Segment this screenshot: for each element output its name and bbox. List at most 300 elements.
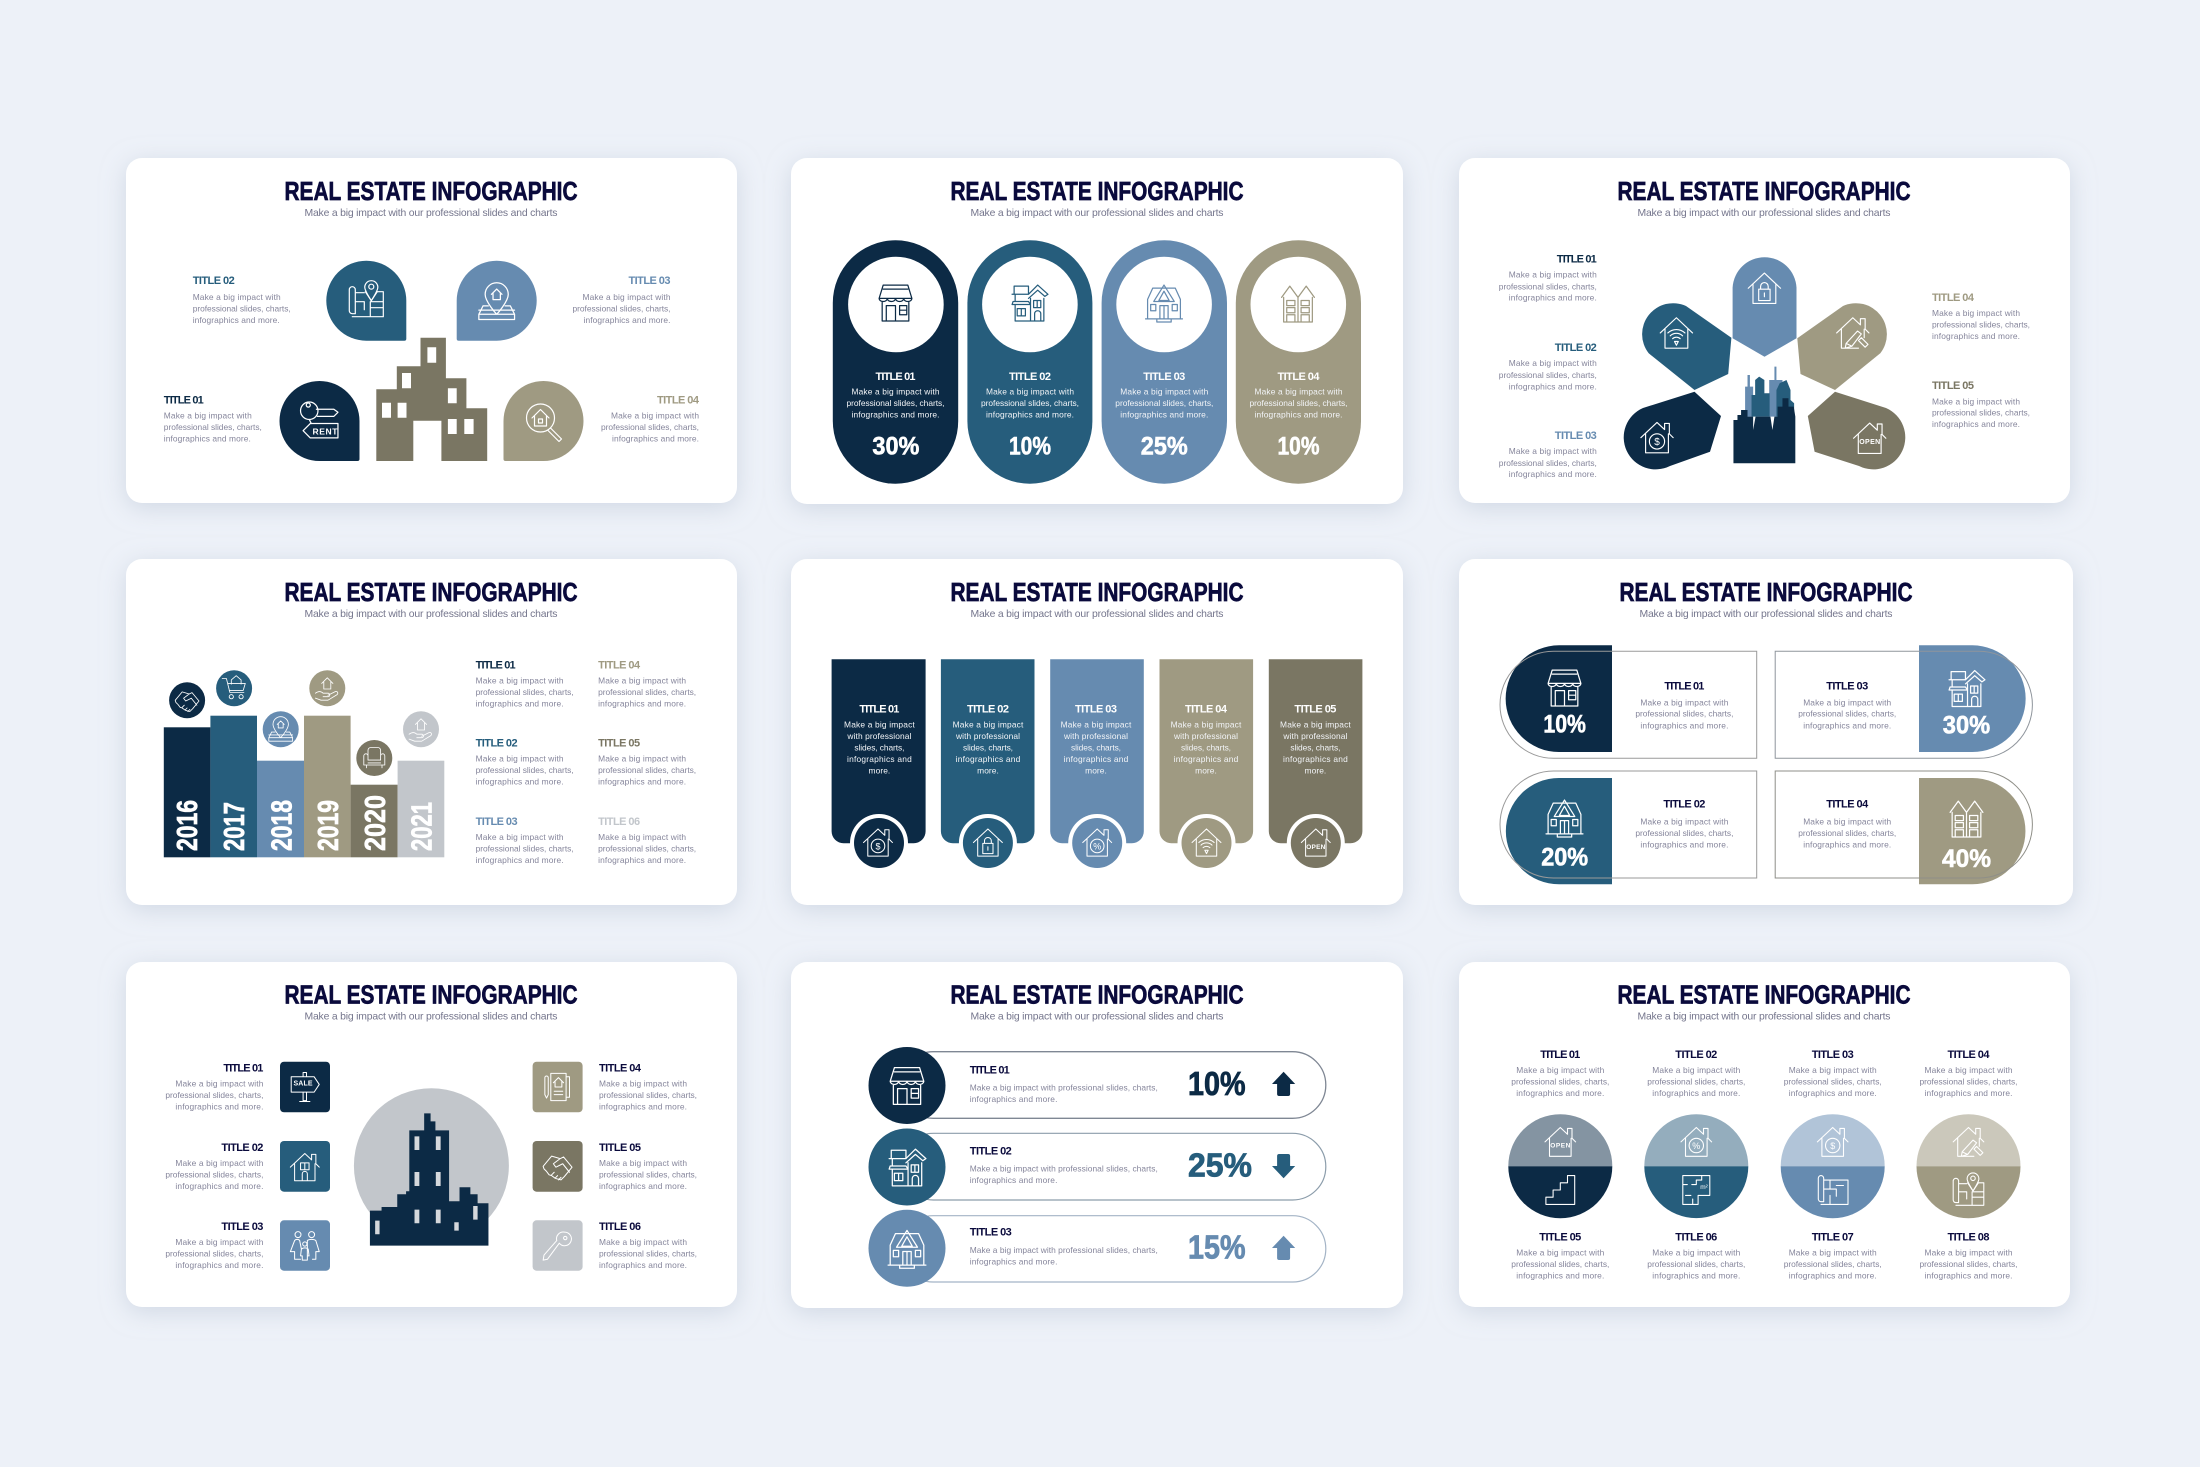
column 2: infographics and xyxy=(956,754,1021,764)
text: title 05 xyxy=(1932,380,2030,429)
text: title 01: TITLE 01 xyxy=(223,1063,263,1075)
row: title 02: Make a big impact with professional slides, charts, xyxy=(970,1164,1158,1174)
icon: hand with home xyxy=(403,711,439,747)
capsule 3: TITLE 03 xyxy=(1143,371,1185,383)
text: title 04: TITLE 04 xyxy=(657,395,700,407)
column 5: infographics and xyxy=(1283,754,1348,764)
column 2: TITLE 02 xyxy=(967,703,1009,715)
row: title 02: TITLE 02 xyxy=(970,1146,1012,1158)
text: title 05: TITLE 05 xyxy=(1539,1232,1581,1244)
text: title 02: professional slides, charts, xyxy=(476,765,574,775)
text: title 01: infographics and more. xyxy=(1509,293,1597,303)
capsule 4: TITLE 04 xyxy=(1278,371,1320,383)
building silhouette xyxy=(370,1113,488,1246)
petal: teal wifi xyxy=(1642,303,1731,390)
text: title 04: professional slides, charts, xyxy=(1932,320,2030,330)
capsule 2 xyxy=(967,240,1092,484)
card: title 03: TITLE 03 xyxy=(1826,680,1868,692)
text: title 04: infographics and more. xyxy=(598,699,686,709)
row: title 03: infographics and more. xyxy=(970,1256,1057,1266)
column 5: slides, charts, xyxy=(1290,742,1340,752)
text: title 07: TITLE 07 xyxy=(1812,1232,1854,1244)
icon tile: handshake xyxy=(533,1141,583,1192)
text: title 08: TITLE 08 xyxy=(1948,1232,1990,1244)
subtitle: Make a big impact with our professional slides and charts xyxy=(970,609,1224,620)
text: title 04: infographics and more. xyxy=(1924,1088,2012,1098)
row: title 01 xyxy=(868,1047,1326,1124)
bar chart: 2020 xyxy=(360,795,392,851)
heading: REAL ESTATE INFOGRAPHIC xyxy=(950,577,1244,607)
panel: five columns with icons xyxy=(791,559,1403,905)
text: title 05 xyxy=(1511,1232,1609,1281)
column 3: % xyxy=(1093,842,1101,852)
column 1: slides, charts, xyxy=(854,742,904,752)
bar chart: 2017 xyxy=(219,802,251,851)
column 4: more. xyxy=(1195,766,1217,776)
heading: REAL ESTATE INFOGRAPHIC xyxy=(284,980,578,1010)
bar chart xyxy=(164,716,444,857)
grey circle backdrop xyxy=(354,1088,509,1243)
text: title 03: Make a big impact with xyxy=(1509,446,1597,456)
heading: REAL ESTATE INFOGRAPHIC xyxy=(1620,577,1913,607)
row: title 03: 15% xyxy=(1188,1229,1246,1266)
card: title 04: infographics and more. xyxy=(1803,840,1891,850)
column 4: TITLE 04 xyxy=(1185,703,1228,715)
text: title 01: infographics and more. xyxy=(476,699,564,709)
text: title 02: TITLE 02 xyxy=(476,738,518,750)
subtitle: Make a big impact with our professional slides and charts xyxy=(1638,1012,1890,1022)
icon: handshake xyxy=(169,682,205,718)
column 4 xyxy=(1160,659,1253,872)
column 3: Make a big impact xyxy=(1061,719,1132,729)
capsule 3 xyxy=(1102,240,1227,484)
capsule 2: 10% xyxy=(1009,433,1051,461)
text: title 02: Make a big impact with xyxy=(193,292,281,302)
text: title 05: Make a big impact with xyxy=(1516,1248,1605,1258)
text: title 02 xyxy=(165,1142,264,1191)
capsule 4 xyxy=(1236,240,1361,484)
capsule 4: infographics and more. xyxy=(1254,409,1342,419)
card: title 02: infographics and more. xyxy=(1640,840,1728,850)
text: title 05: TITLE 05 xyxy=(1932,380,1974,392)
heading: REAL ESTATE INFOGRAPHIC xyxy=(950,980,1244,1010)
text: title 04: professional slides, charts, xyxy=(601,422,699,432)
column 2 xyxy=(941,659,1034,872)
text: title 03: infographics and more. xyxy=(1509,469,1597,479)
text: title 05: professional slides, charts, xyxy=(598,765,696,775)
row: title 01: TITLE 01 xyxy=(970,1064,1010,1076)
text: title 03: Make a big impact with xyxy=(175,1237,264,1247)
heading: REAL ESTATE INFOGRAPHIC xyxy=(284,176,578,206)
card: title 01: TITLE 01 xyxy=(1664,680,1704,692)
bar chart: 2021 xyxy=(406,802,438,851)
split circle 2: % xyxy=(1692,1141,1700,1151)
split circle 4 xyxy=(1916,1114,2020,1218)
capsule 1: TITLE 01 xyxy=(876,371,916,383)
text: title 03 xyxy=(165,1221,264,1270)
text: title 02 xyxy=(1499,342,1597,391)
column 2: Make a big impact xyxy=(953,719,1024,729)
capsule 4: Make a big impact with xyxy=(1254,386,1343,396)
column 4: with professional xyxy=(1173,731,1238,741)
text: title 04: TITLE 04 xyxy=(598,660,641,672)
text: title 05: Make a big impact with xyxy=(1932,396,2020,406)
text: title 02 xyxy=(476,738,574,787)
text: title 03: professional slides, charts, xyxy=(1784,1076,1882,1086)
text: title 02: TITLE 02 xyxy=(193,275,235,287)
panel: central building with six items xyxy=(126,962,737,1307)
text: title 02: Make a big impact with xyxy=(175,1158,264,1168)
text: title 05: infographics and more. xyxy=(599,1181,687,1191)
capsule 1: 30% xyxy=(872,433,919,461)
card: title 04 xyxy=(1775,771,2032,884)
text: title 02: Make a big impact with xyxy=(476,754,564,764)
text: title 04 xyxy=(1932,292,2030,341)
card: title 03: 30% xyxy=(1943,712,1990,740)
text: title 03: infographics and more. xyxy=(175,1260,263,1270)
text: title 04: professional slides, charts, xyxy=(598,687,696,697)
text: title 07: infographics and more. xyxy=(1789,1271,1877,1281)
text: title 05: infographics and more. xyxy=(1932,419,2020,429)
row: title 02: infographics and more. xyxy=(970,1175,1057,1185)
capsule 3: Make a big impact with xyxy=(1120,386,1209,396)
icon tile: family xyxy=(280,1220,330,1271)
text: title 02 xyxy=(1647,1049,1745,1098)
column 5: Make a big impact xyxy=(1280,719,1351,729)
icon: armchair xyxy=(356,740,392,776)
text: title 04: TITLE 04 xyxy=(599,1063,642,1075)
column 4: slides, charts, xyxy=(1181,742,1231,752)
text: title 01: infographics and more. xyxy=(175,1102,263,1112)
row: title 03: Make a big impact with professional slides, charts, xyxy=(970,1245,1158,1255)
text: title 01: professional slides, charts, xyxy=(1511,1076,1609,1086)
split circle 2 xyxy=(1644,1114,1748,1218)
petal: khaki pen xyxy=(1797,303,1887,390)
text: title 03 xyxy=(476,816,574,865)
text: title 03 xyxy=(1499,430,1597,479)
card: title 01 xyxy=(1500,645,1757,758)
card: title 04: Make a big impact with xyxy=(1803,817,1892,827)
text: title 07 xyxy=(1784,1232,1882,1281)
text: title 06 xyxy=(1647,1232,1745,1281)
capsule 3: professional slides, charts, xyxy=(1115,398,1213,408)
text: title 03: infographics and more. xyxy=(476,855,564,865)
subtitle: Make a big impact with our professional slides and charts xyxy=(304,208,558,219)
text: title 02: professional slides, charts, xyxy=(193,304,291,314)
column 2: slides, charts, xyxy=(963,742,1013,752)
column 3: TITLE 03 xyxy=(1075,703,1117,715)
text: title 04: professional slides, charts, xyxy=(599,1090,697,1100)
capsule 1: infographics and more. xyxy=(852,409,940,419)
capsule 2: Make a big impact with xyxy=(986,386,1074,396)
text: title 03: Make a big impact with xyxy=(582,292,671,302)
pin: title 04 search xyxy=(504,381,584,461)
text: title 01 xyxy=(164,395,262,444)
text: title 01: infographics and more. xyxy=(164,434,251,444)
text: title 04 xyxy=(598,660,696,709)
panel: four pill cards with percentages xyxy=(1459,559,2073,905)
heading: REAL ESTATE INFOGRAPHIC xyxy=(1618,176,1911,206)
card: title 01: Make a big impact with xyxy=(1640,697,1729,707)
panel: five petals with city xyxy=(1459,158,2070,503)
column 4: Make a big impact xyxy=(1171,719,1242,729)
split circle 3: $ xyxy=(1830,1141,1835,1151)
subtitle: Make a big impact with our professional slides and charts xyxy=(304,609,558,620)
heading: REAL ESTATE INFOGRAPHIC xyxy=(950,176,1244,206)
text: title 08: Make a big impact with xyxy=(1924,1248,2013,1258)
text: title 06: professional slides, charts, xyxy=(1647,1259,1745,1269)
text: title 07: professional slides, charts, xyxy=(1784,1259,1882,1269)
text: title 01: professional slides, charts, xyxy=(476,687,574,697)
text: title 01: TITLE 01 xyxy=(164,395,204,407)
card: title 04: 40% xyxy=(1942,845,1991,873)
text: title 02: professional slides, charts, xyxy=(1647,1076,1745,1086)
text: title 04: Make a big impact with xyxy=(599,1079,687,1089)
text: title 04: infographics and more. xyxy=(612,434,699,444)
text: title 01 xyxy=(165,1063,264,1112)
text: title 02: professional slides, charts, xyxy=(165,1170,263,1180)
column 5 xyxy=(1269,659,1362,872)
text: title 06: infographics and more. xyxy=(598,855,686,865)
text: title 03: TITLE 03 xyxy=(221,1221,263,1233)
text: title 08 xyxy=(1920,1232,2018,1281)
capsule 4: 10% xyxy=(1278,433,1320,461)
text: title 05 xyxy=(598,738,696,787)
capsule 3: 25% xyxy=(1141,433,1188,461)
icon: hand with house xyxy=(309,670,345,706)
capsule 2: infographics and more. xyxy=(986,409,1074,419)
text: title 01: professional slides, charts, xyxy=(1499,281,1597,291)
text: title 04: TITLE 04 xyxy=(1948,1049,1990,1061)
icon tile: sale sign xyxy=(280,1062,330,1112)
heading: REAL ESTATE INFOGRAPHIC xyxy=(284,577,578,607)
pin: title 02 map xyxy=(326,261,406,341)
icon tile: contract xyxy=(533,1062,583,1112)
text: title 03: professional slides, charts, xyxy=(476,844,574,854)
text: title 04: Make a big impact with xyxy=(611,411,699,421)
text: title 06 xyxy=(598,816,696,865)
text: title 02: professional slides, charts, xyxy=(1499,370,1597,380)
text: title 03: professional slides, charts, xyxy=(572,304,670,314)
text: title 05: professional slides, charts, xyxy=(1511,1259,1609,1269)
column 5: with professional xyxy=(1282,731,1348,741)
petal: olive open: OPEN xyxy=(1859,439,1880,446)
text: title 01 xyxy=(476,660,574,709)
text: title 04: professional slides, charts, xyxy=(1920,1076,2018,1086)
text: title 01: Make a big impact with xyxy=(175,1079,264,1089)
card: title 01: infographics and more. xyxy=(1640,720,1728,730)
column 4: infographics and xyxy=(1174,754,1239,764)
card: title 03: Make a big impact with xyxy=(1803,697,1892,707)
text: title 06: infographics and more. xyxy=(599,1260,687,1270)
text: title 02: infographics and more. xyxy=(1509,381,1597,391)
capsule 4: professional slides, charts, xyxy=(1250,398,1348,408)
petal: olive open xyxy=(1808,392,1905,469)
text: title 03: Make a big impact with xyxy=(476,832,564,842)
row: title 01: Make a big impact with professional slides, charts, xyxy=(970,1082,1158,1092)
subtitle: Make a big impact with our professional slides and charts xyxy=(1640,609,1892,620)
card: title 03: infographics and more. xyxy=(1803,720,1891,730)
column 5: TITLE 05 xyxy=(1294,703,1336,715)
text: title 01: Make a big impact with xyxy=(164,411,252,421)
text: title 04: Make a big impact with xyxy=(1932,308,2020,318)
column 3: slides, charts, xyxy=(1071,742,1121,752)
text: title 05 xyxy=(599,1142,697,1191)
column 3: infographics and xyxy=(1064,754,1129,764)
text: title 06: TITLE 06 xyxy=(1675,1232,1717,1244)
split circle 1: OPEN xyxy=(1550,1142,1571,1150)
icon: cart xyxy=(216,670,252,706)
card: title 02: Make a big impact with xyxy=(1640,817,1729,827)
bar chart: 2016 xyxy=(172,800,204,851)
card: title 03: professional slides, charts, xyxy=(1798,709,1896,719)
capsule 1 xyxy=(833,240,958,484)
column 1 xyxy=(832,659,926,872)
text: title 05: TITLE 05 xyxy=(599,1142,641,1154)
text: title 02: infographics and more. xyxy=(1652,1088,1740,1098)
card: title 02: professional slides, charts, xyxy=(1635,828,1733,838)
panel: yearly bar chart xyxy=(126,559,737,905)
card: title 02 xyxy=(1500,771,1757,884)
column 1: more. xyxy=(869,766,890,776)
column 5: more. xyxy=(1305,766,1326,776)
petal: navy dollar xyxy=(1624,392,1721,469)
text: title 08: infographics and more. xyxy=(1924,1271,2012,1281)
text: title 01 xyxy=(1499,254,1597,303)
text: title 03 xyxy=(1784,1049,1882,1098)
row: title 01: infographics and more. xyxy=(970,1094,1057,1104)
text: title 06: Make a big impact with xyxy=(599,1237,687,1247)
text: title 02: TITLE 02 xyxy=(1555,342,1597,354)
text: title 03: TITLE 03 xyxy=(1555,430,1597,442)
text: title 01: Make a big impact with xyxy=(476,676,564,686)
text: title 02: infographics and more. xyxy=(193,315,280,325)
text: title 02 xyxy=(193,275,291,325)
text: title 05: Make a big impact with xyxy=(598,754,686,764)
icon tile: house xyxy=(280,1141,330,1192)
text: title 05: infographics and more. xyxy=(598,777,686,787)
column 5: OPEN xyxy=(1306,844,1326,851)
pin: title 01 rent key: RENT xyxy=(312,426,338,436)
capsule 2: professional slides, charts, xyxy=(981,398,1079,408)
text: title 04: infographics and more. xyxy=(599,1102,687,1112)
panel: four capsules with percentages xyxy=(791,158,1403,504)
card: title 01: 10% xyxy=(1543,710,1586,738)
bar chart: 2019 xyxy=(313,800,345,851)
text: title 04: Make a big impact with xyxy=(1924,1065,2013,1075)
text: title 01: Make a big impact with xyxy=(1516,1065,1605,1075)
split circle 3 xyxy=(1781,1114,1885,1218)
column 3: with professional xyxy=(1063,731,1128,741)
text: title 01: TITLE 01 xyxy=(1540,1049,1580,1061)
panel: split circles with eight titles xyxy=(1459,962,2070,1307)
text: title 02: Make a big impact with xyxy=(1509,358,1597,368)
row: title 01: 10% xyxy=(1188,1065,1246,1102)
text: title 01: professional slides, charts, xyxy=(165,1090,263,1100)
text: title 07: Make a big impact with xyxy=(1789,1248,1877,1258)
card: title 02: 20% xyxy=(1541,844,1588,872)
petal: blue lock xyxy=(1733,257,1796,357)
text: title 06: Make a big impact with xyxy=(1652,1248,1741,1258)
text: title 05: professional slides, charts, xyxy=(599,1170,697,1180)
column 3 xyxy=(1050,659,1144,872)
card: title 01: professional slides, charts, xyxy=(1635,709,1733,719)
text: title 02: infographics and more. xyxy=(175,1181,263,1191)
capsule 1: professional slides, charts, xyxy=(846,398,944,408)
pin: title 01 rent key xyxy=(280,381,360,461)
row: title 02 xyxy=(868,1128,1326,1206)
column 1: with professional xyxy=(846,731,912,741)
text: title 03: professional slides, charts, xyxy=(165,1248,263,1258)
subtitle: Make a big impact with our professional slides and charts xyxy=(970,1012,1224,1022)
text: title 04: infographics and more. xyxy=(1932,331,2020,341)
text: title 02: TITLE 02 xyxy=(221,1142,263,1154)
text: title 03: Make a big impact with xyxy=(1789,1065,1877,1075)
text: title 08: professional slides, charts, xyxy=(1920,1259,2018,1269)
card: title 02: TITLE 02 xyxy=(1663,799,1705,811)
text: title 04 xyxy=(601,395,700,444)
text: title 04 xyxy=(599,1063,697,1112)
card: title 04: TITLE 04 xyxy=(1826,799,1869,811)
text: title 06: Make a big impact with xyxy=(598,832,686,842)
text: title 05: TITLE 05 xyxy=(598,738,640,750)
text: title 06: TITLE 06 xyxy=(598,816,640,828)
row: title 03: TITLE 03 xyxy=(970,1227,1012,1239)
column 1: $ xyxy=(875,842,881,852)
panel: pin teardrops around building xyxy=(126,158,737,503)
text: title 01: professional slides, charts, xyxy=(164,422,262,432)
column 2: with professional xyxy=(955,731,1020,741)
row: title 02: 25% xyxy=(1188,1147,1252,1184)
pin: title 03 location xyxy=(457,261,537,341)
subtitle: Make a big impact with our professional slides and charts xyxy=(970,208,1224,219)
split circle 2: m² xyxy=(1700,1184,1709,1191)
card: title 04: professional slides, charts, xyxy=(1798,828,1896,838)
text: title 05: infographics and more. xyxy=(1516,1271,1604,1281)
text: title 04: TITLE 04 xyxy=(1932,292,1975,304)
text: title 01: infographics and more. xyxy=(1516,1088,1604,1098)
text: title 03: professional slides, charts, xyxy=(1499,458,1597,468)
building xyxy=(376,338,487,461)
city silhouette xyxy=(1733,367,1795,463)
text: title 02: Make a big impact with xyxy=(1652,1065,1741,1075)
text: title 04: Make a big impact with xyxy=(598,676,686,686)
text: title 01: Make a big impact with xyxy=(1509,270,1597,280)
bar chart: 2018 xyxy=(267,800,299,851)
text: title 01: TITLE 01 xyxy=(1557,254,1597,266)
subtitle: Make a big impact with our professional slides and charts xyxy=(1638,208,1890,219)
column 3: more. xyxy=(1085,766,1107,776)
capsule 1: Make a big impact with xyxy=(852,386,940,396)
capsule 3: infographics and more. xyxy=(1120,409,1208,419)
text: title 01: TITLE 01 xyxy=(476,660,516,672)
text: title 03: TITLE 03 xyxy=(1812,1049,1854,1061)
icon tile: key xyxy=(533,1220,583,1271)
text: title 03: infographics and more. xyxy=(584,315,670,325)
panel: three horizontal pills with arrows xyxy=(791,962,1403,1308)
column 1: Make a big impact xyxy=(844,719,915,729)
text: title 01 xyxy=(1511,1049,1609,1098)
text: title 03 xyxy=(572,275,671,325)
text: title 05: professional slides, charts, xyxy=(1932,408,2030,418)
subtitle: Make a big impact with our professional slides and charts xyxy=(304,1012,558,1022)
icon: map pin xyxy=(263,711,299,747)
row: title 03 xyxy=(868,1210,1326,1287)
card: title 03 xyxy=(1775,645,2032,758)
text: title 06: TITLE 06 xyxy=(599,1221,641,1233)
petal: navy dollar: $ xyxy=(1654,437,1660,448)
text: title 06: infographics and more. xyxy=(1652,1271,1740,1281)
